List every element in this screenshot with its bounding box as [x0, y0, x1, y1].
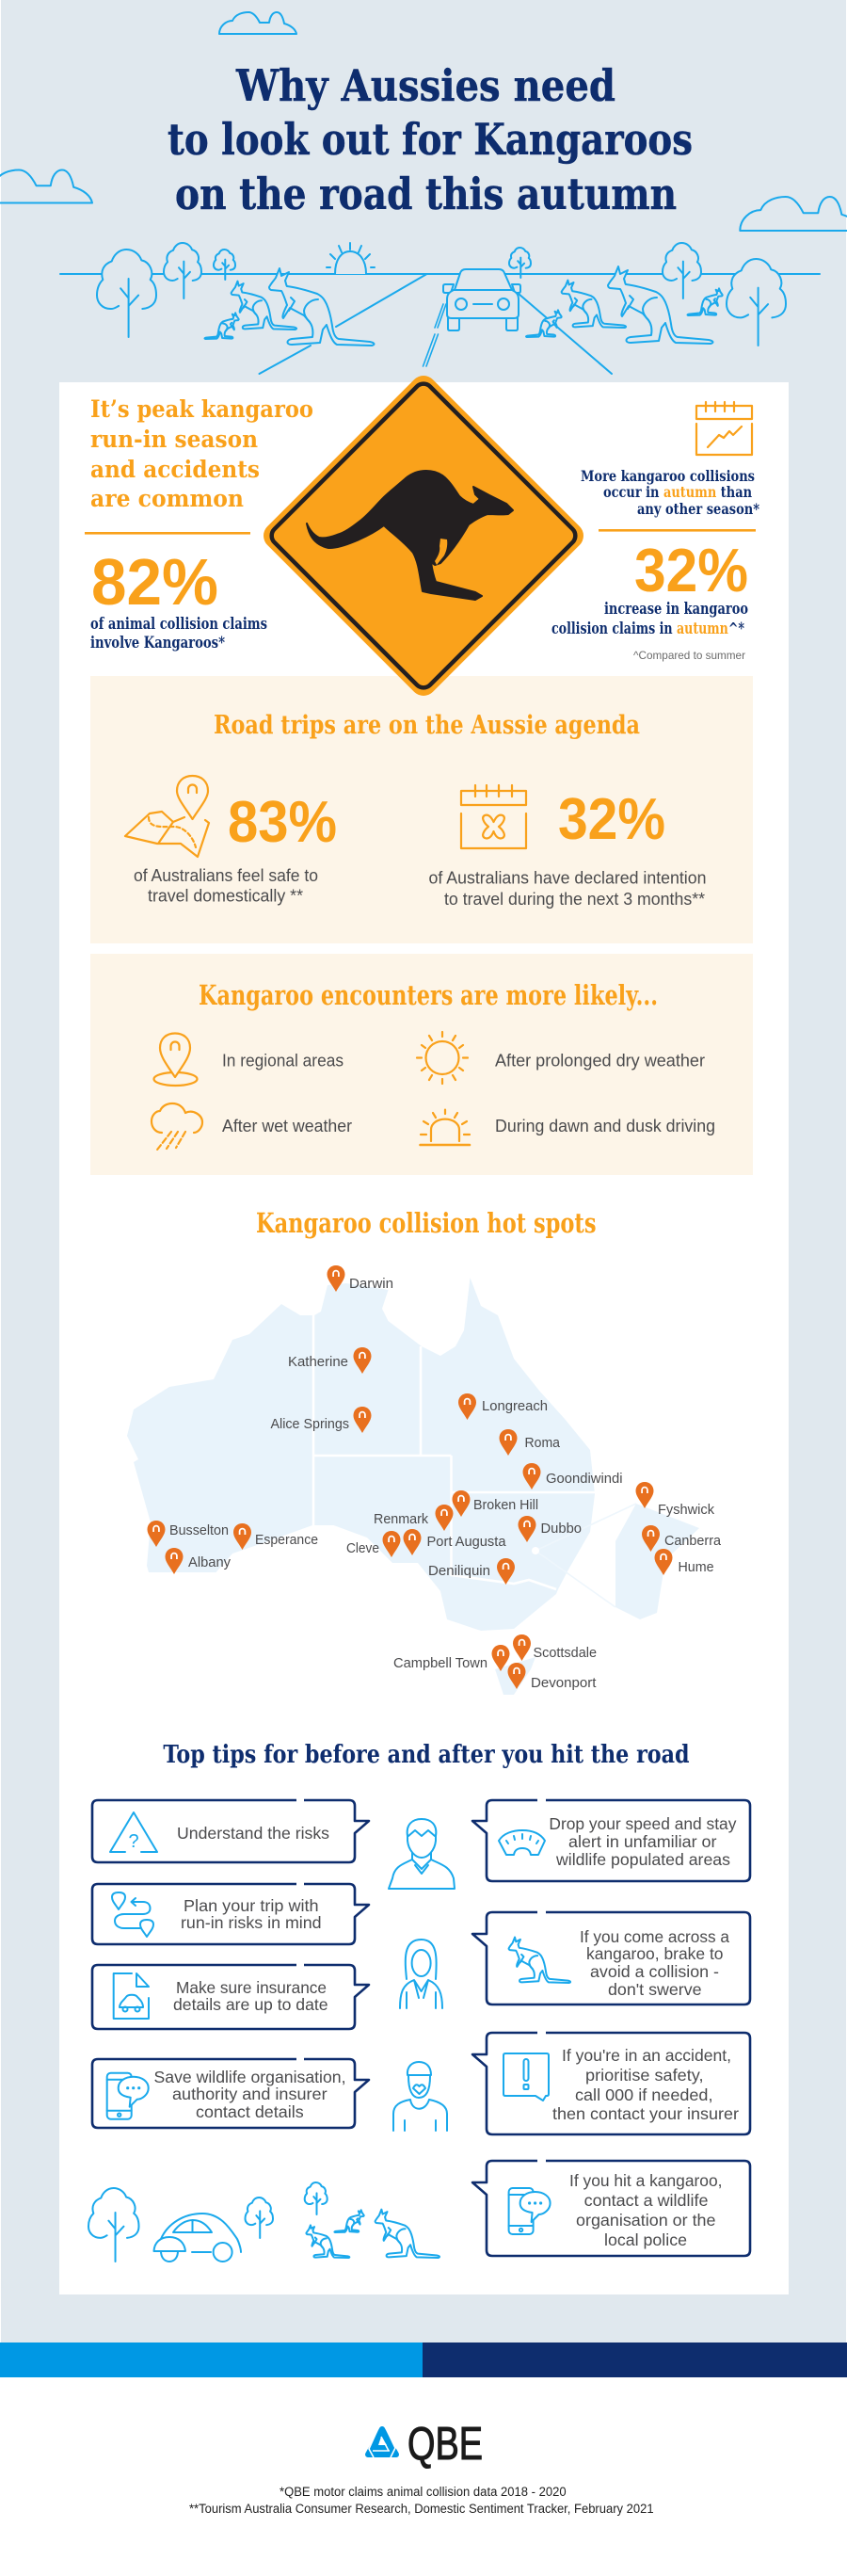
map pin: Fyshwick: Fyshwick [658, 1503, 715, 1518]
icon: kangaroo medium left [232, 282, 296, 330]
stat: 82%: of animal collision claims [90, 615, 267, 634]
map pin: Esperance: Esperance [255, 1533, 318, 1548]
text: feel safe [134, 866, 318, 906]
tip: don't swerve: kangaroo, brake to [586, 1944, 723, 1963]
tip: save contact details: Save wildlife organisation, [154, 2068, 346, 2086]
tip: save contact details: contact details [196, 2102, 304, 2121]
heading: peak season: It’s peak kangaroo [90, 395, 313, 424]
QBE logo: QBE [408, 2419, 483, 2470]
heading: hot spots: Kangaroo collision hot spots [256, 1207, 597, 1239]
tip: understand the risks: Understand the risks [177, 1824, 329, 1843]
text: more collisions in autumn: More kangaroo collisions [581, 467, 755, 485]
tip: plan your trip: run-in risks in mind [181, 1913, 322, 1932]
text: feel safe: travel domestically ** [148, 887, 303, 906]
text: more collisions in autumn: any other season* [637, 500, 760, 518]
footnotes [189, 2485, 654, 2516]
icon: kangaroo large right [608, 266, 712, 344]
icon: large tree [88, 2188, 139, 2262]
heading: top tips: Top tips for before and after you hit the road [163, 1740, 690, 1769]
icon: man [389, 1819, 455, 1889]
road scene illustration [60, 243, 820, 374]
tip: understand the risks [92, 1800, 369, 1862]
icon: calendar with rising chart [696, 402, 752, 455]
tip: drop your speed: Drop your speed and stay [549, 1814, 737, 1833]
icon: small tree [245, 2198, 273, 2238]
panel: encounters [90, 954, 753, 1175]
stat: 82%: involve Kangaroos* [90, 634, 225, 652]
stat: 32% autumn increase: collision claims in autumn^* [551, 620, 744, 638]
map pin: Alice Springs: Alice Springs [271, 1417, 349, 1432]
text: more collisions in autumn: occur in autumn than [603, 483, 752, 501]
text: intention to travel: of Australians have declared intention [429, 868, 706, 887]
map pin: Cleve: Cleve [346, 1541, 379, 1556]
heading: peak season [90, 395, 313, 513]
cloud top [219, 12, 296, 34]
map pin: Dubbo: Dubbo [540, 1521, 582, 1537]
map pin: Busselton: Busselton [169, 1523, 229, 1538]
map pin: Roma: Roma [525, 1436, 561, 1451]
map pin: Darwin: Darwin [349, 1277, 393, 1292]
Tasmania [495, 1657, 535, 1695]
icon: sun [417, 1032, 468, 1084]
tip: save contact details: authority and insurer [172, 2085, 328, 2103]
heading: road trips: Road trips are on the Aussie agenda [214, 710, 640, 740]
stat: 82% [85, 532, 267, 652]
tip: don't swerve: don't swerve [608, 1980, 702, 1999]
tip: drop your speed: wildlife populated areas [555, 1850, 730, 1869]
tip: plan your trip [92, 1884, 369, 1944]
icon: kangaroo small [306, 2225, 349, 2258]
icon: kangaroo tiny right [688, 288, 723, 315]
label: dry weather: After prolonged dry weather [495, 1051, 705, 1070]
tip: in an accident: call 000 if needed, [575, 2085, 713, 2104]
text: intention to travel: to travel during the next 3 months** [444, 890, 705, 909]
icon: location pin [154, 1034, 198, 1086]
icon: calendar with cross [461, 785, 526, 848]
map pin: Longreach: Longreach [482, 1399, 548, 1414]
tip: insurance details [92, 1965, 369, 2029]
heading: encounters: Kangaroo encounters are more likely... [199, 979, 658, 1011]
icon: kangaroo tiny centre [526, 310, 562, 337]
icon: rain cloud [152, 1103, 202, 1151]
footer bar [0, 2343, 847, 2377]
map pin: Deniliquin: Deniliquin [428, 1564, 490, 1579]
tip: drop your speed: alert in unfamiliar or [568, 1832, 717, 1851]
text: intention to travel [429, 868, 706, 909]
stat: 82%: 82% [91, 545, 218, 619]
map pin: Deniliquin [428, 1558, 515, 1585]
tip: understand the risks: ? [128, 1831, 139, 1852]
heading: peak season: and accidents [90, 456, 260, 484]
map pin: Albany [166, 1548, 232, 1574]
icon: kangaroo tiny left [204, 313, 239, 339]
cloud left [0, 169, 92, 203]
icon: tree 1 [97, 250, 156, 337]
map pin: Roma [499, 1429, 561, 1456]
icon: kangaroo medium [376, 2210, 439, 2258]
white content panel [59, 382, 789, 2294]
map pin: Hume [655, 1549, 713, 1575]
title: Why Aussies need [235, 60, 615, 111]
icon: tree 4 [509, 248, 531, 278]
tip: insurance details: Make sure insurance [176, 1978, 327, 1997]
tip: if you hit a kangaroo: If you hit a kangaroo, [569, 2171, 723, 2190]
tip: if you hit a kangaroo: local police [604, 2230, 687, 2249]
icon: kangaroo tiny [334, 2210, 364, 2232]
stat: 32% autumn increase: increase in kangaroo [604, 600, 748, 619]
map pin: Port Augusta: Port Augusta [427, 1535, 506, 1550]
map of Australia [127, 1278, 699, 1695]
map pin: Katherine [288, 1347, 371, 1374]
label: regional areas: In regional areas [222, 1051, 344, 1070]
title [168, 60, 693, 219]
tip: in an accident [472, 2033, 750, 2134]
QBE logo [368, 2419, 483, 2470]
stat: 32% autumn increase: 32% [634, 536, 748, 604]
map pin: Longreach [458, 1393, 548, 1420]
tip: if you hit a kangaroo: organisation or the [576, 2211, 715, 2230]
bottom illustration: car, trees, kangaroos [88, 2182, 439, 2262]
tip: drop your speed [472, 1800, 750, 1881]
tip: don't swerve [472, 1912, 750, 2004]
map pin: Fyshwick [636, 1482, 715, 1518]
map pin: Scottsdale: Scottsdale [533, 1646, 597, 1661]
map pin: Canberra: Canberra [664, 1534, 722, 1549]
title: to look out for Kangaroos [168, 114, 693, 165]
icon: sunrise [420, 1110, 470, 1145]
label: dawn and dusk: During dawn and dusk driving [495, 1117, 715, 1135]
panel: road trips [90, 676, 753, 943]
tip: if you hit a kangaroo: contact a wildlife [584, 2191, 708, 2210]
tip: if you hit a kangaroo [472, 2161, 750, 2256]
text: feel safe: of Australians feel safe to [134, 866, 318, 885]
map pin: Campbell Town: Campbell Town [393, 1656, 487, 1671]
icon: kangaroo warning road sign [258, 370, 589, 701]
map pin: Darwin [328, 1265, 393, 1292]
footnotes: **Tourism Australia Consumer Research, Domestic Sentiment Tracker, February 2021 [189, 2502, 654, 2516]
map pin: Goondiwindi: Goondiwindi [546, 1472, 623, 1487]
map pin: Devonport [508, 1663, 597, 1691]
icon: bearded man [393, 2062, 447, 2131]
map pin: Renmark [374, 1505, 454, 1531]
icon: tree 2 [164, 243, 201, 298]
map pin: Alice Springs [271, 1407, 371, 1433]
icon: tree 6 [727, 259, 786, 346]
map pin: Broken Hill [452, 1490, 538, 1517]
icon: woman [400, 1940, 442, 2008]
map pin: Cleve [346, 1531, 401, 1557]
stat: 32% autumn increase [551, 529, 756, 662]
text: more collisions in autumn [581, 467, 760, 518]
tip: don't swerve: If you come across a [580, 1927, 729, 1946]
map pin: Scottsdale [513, 1634, 597, 1661]
stat: 32% intention: 32% [558, 787, 665, 852]
icon: small tree upper [305, 2182, 328, 2214]
map pin: Devonport: Devonport [531, 1676, 597, 1691]
label: wet weather: After wet weather [222, 1117, 352, 1135]
stat: 32% autumn increase: ^Compared to summer [633, 649, 745, 662]
icon: sun [327, 243, 375, 274]
map pin: Goondiwindi [523, 1463, 623, 1489]
heading: peak season: are common [90, 485, 244, 513]
tip: in an accident: If you're in an accident, [562, 2046, 731, 2065]
title: on the road this autumn [175, 169, 677, 219]
map pin: Hume: Hume [678, 1560, 713, 1575]
stat: 83%: 83% [228, 790, 337, 855]
map pin: Port Augusta [403, 1529, 506, 1555]
ACT inset [615, 1504, 699, 1619]
map pin: Campbell Town [393, 1645, 510, 1671]
icon: beetle car [154, 2214, 241, 2262]
map pin: Renmark: Renmark [374, 1512, 429, 1527]
icon: kangaroo large left [269, 268, 374, 346]
tip: insurance details: details are up to date [173, 1995, 328, 2014]
tip: in an accident: prioritise safety, [585, 2066, 704, 2085]
map pin: Canberra [642, 1525, 722, 1552]
map pin: Dubbo [518, 1516, 582, 1542]
tip: in an accident: then contact your insurer [552, 2104, 739, 2123]
heading: peak season: run-in season [90, 426, 258, 454]
icon: car front [443, 269, 520, 330]
footnotes: *QBE motor claims animal collision data 2018 - 2020 [280, 2485, 567, 2499]
tip: don't swerve: avoid a collision - [590, 1962, 719, 1981]
tip: plan your trip: Plan your trip with [184, 1896, 319, 1915]
icon: tree 5 [663, 243, 701, 298]
map pin: Albany: Albany [188, 1555, 232, 1570]
icon: map with pin [125, 776, 209, 857]
tip: save contact details [92, 2059, 369, 2128]
icon: kangaroo medium right [562, 281, 626, 328]
cloud right [740, 197, 847, 231]
icon: tree 3 [214, 250, 235, 280]
map pin: Esperance [233, 1523, 318, 1550]
map pin: Katherine: Katherine [288, 1355, 348, 1370]
map pin: Broken Hill: Broken Hill [473, 1498, 538, 1513]
map pin: Busselton [147, 1521, 229, 1547]
